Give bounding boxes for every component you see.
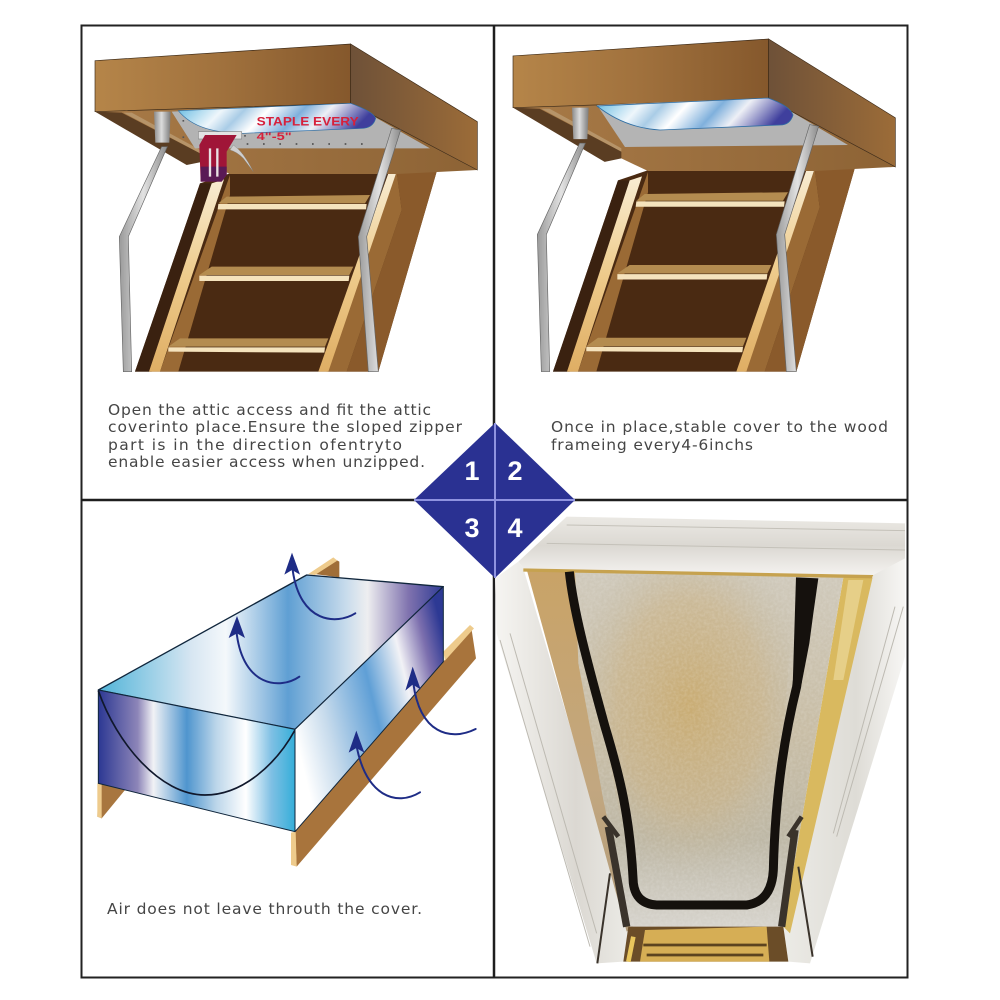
number 3: 3 xyxy=(464,513,480,543)
wood left jamb xyxy=(527,569,633,932)
panel 4: photo of installed cover xyxy=(495,517,905,963)
text: step 2 instructions xyxy=(551,418,888,454)
arrows: air flow xyxy=(237,570,476,798)
text: step 2 instructions: frameing every4-6inchs xyxy=(551,436,753,454)
box front face with zipper xyxy=(98,690,295,832)
label: staple every: 4"-5" xyxy=(257,131,292,143)
text: step 1 instructions: Open the attic access and fit the attic xyxy=(108,401,431,419)
label: staple every xyxy=(257,115,359,143)
panel 3: foil cover box illustration xyxy=(97,553,476,867)
hinges and springs xyxy=(597,817,813,963)
panel 1: staple illustration xyxy=(95,44,477,372)
attic ladder at bottom xyxy=(623,927,788,962)
box top face xyxy=(98,575,443,729)
wood boards xyxy=(97,557,476,867)
text: step 2 instructions: Once in place,stable cover to the wood xyxy=(551,418,888,436)
text: step 3 caption: Air does not leave throuth the cover. xyxy=(107,900,422,918)
text: step 1 instructions: enable easier access when unzipped. xyxy=(108,453,425,471)
number 2: 2 xyxy=(507,456,523,486)
badge: step numbers diamond xyxy=(414,423,575,578)
silver framing with staple holes xyxy=(172,103,430,148)
door trim xyxy=(495,517,905,963)
box right face xyxy=(295,587,443,832)
icon: staple gun xyxy=(198,132,253,182)
number 1: 1 xyxy=(464,456,480,486)
panel frame xyxy=(81,25,908,978)
silver framing and foil window xyxy=(597,98,848,147)
text: step 1 instructions: part is in the direction ofentryto xyxy=(108,436,402,454)
wood right jamb xyxy=(783,577,873,933)
foil insulation xyxy=(575,572,843,927)
text: step 1 instructions: coverinto place.Ensure the sloped zipper xyxy=(108,418,463,436)
panel 2: stapled cover illustration xyxy=(513,39,895,372)
text: step 1 instructions xyxy=(108,401,463,471)
zipper strip xyxy=(569,572,818,905)
top wood edge xyxy=(523,568,873,578)
label: staple every: STAPLE EVERY xyxy=(257,115,359,129)
number 4: 4 xyxy=(507,513,523,543)
